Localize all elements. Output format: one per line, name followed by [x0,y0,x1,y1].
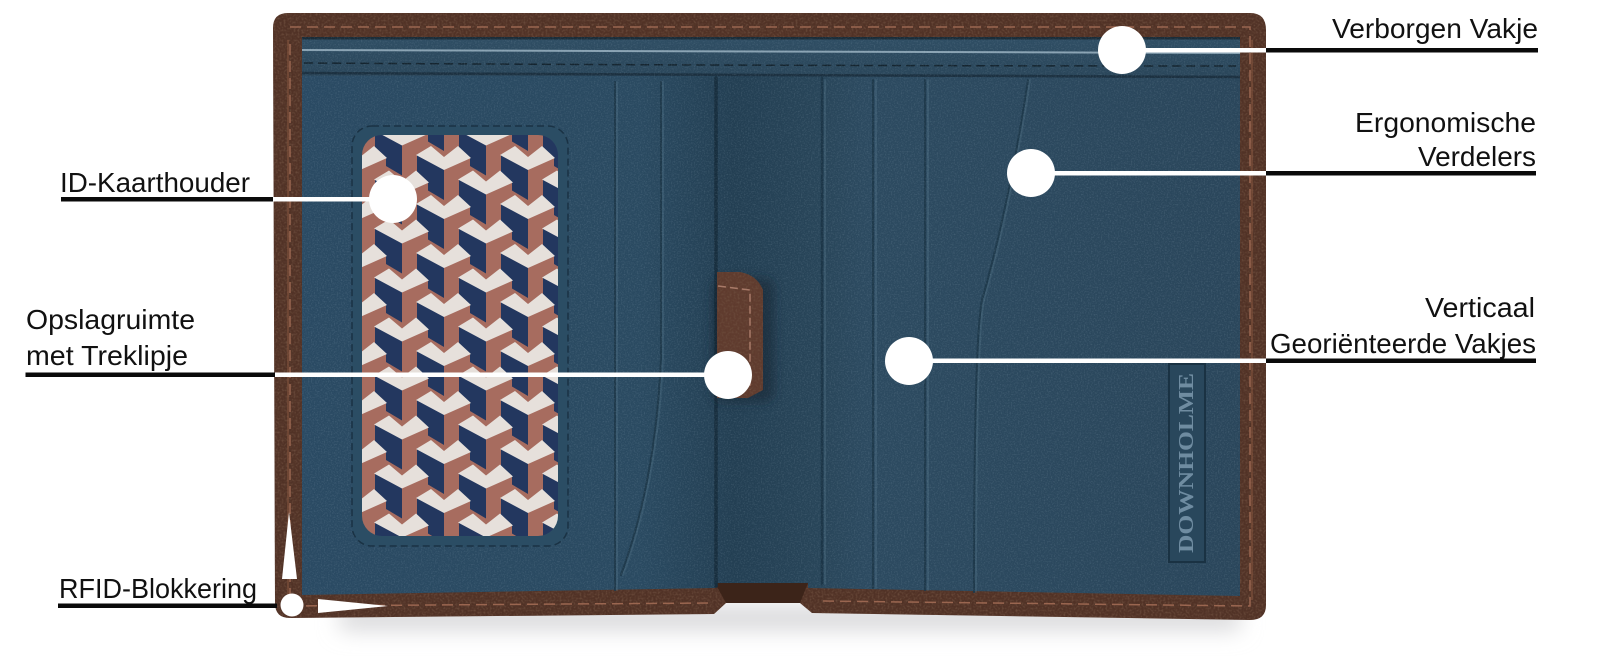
top hidden pocket band [302,37,1240,77]
callout: Opslagruimte met Treklipje [26,304,752,399]
frame leather grain [273,13,1266,620]
embossed logo [1169,364,1205,562]
callout: Opslagruimte met Treklipje: met Treklipje [26,340,188,371]
frame inner seam [288,40,1252,600]
pull tab shadow [712,278,774,402]
ID window patterned lining [362,135,558,536]
callout: Verborgen Vakje: Verborgen Vakje [1332,13,1538,44]
card slot lines [615,78,1030,592]
wallet [273,13,1266,620]
callout: ID-Kaarthouder: ID-Kaarthouder [60,167,250,198]
callout: Verticaal Georiënteerde Vakjes: Georiënteerde Vakjes [1270,328,1536,359]
spine bottom dark gusset [715,583,808,603]
callout: Opslagruimte met Treklipje: Opslagruimte [26,304,195,335]
callout: Ergonomische Verdelers: Verdelers [1418,141,1536,172]
arrow: RFID vertical edge [282,512,297,579]
callout: RFID-Blokkering: RFID-Blokkering [59,573,257,604]
callout: ID-Kaarthouder [60,167,417,223]
frame stitching [290,27,1250,606]
brown leather outer frame [273,13,1266,620]
ID window stitched surround [352,126,568,546]
navy interior [302,37,1240,596]
ground shadow [340,606,1240,630]
callout: Verticaal Georiënteerde Vakjes: Verticaal [1425,292,1535,323]
callout: Verborgen Vakje [1098,13,1538,74]
callout: Ergonomische Verdelers: Ergonomische [1355,107,1536,138]
embossed logo: DOWNHOLME [1174,373,1198,553]
leather grain [302,37,1240,596]
callout: Ergonomische Verdelers [1007,107,1536,197]
callout: RFID-Blokkering [58,512,388,616]
arrow: RFID horizontal edge [318,599,388,613]
callout: Verticaal Georiënteerde Vakjes [885,292,1536,385]
pull tab [717,272,763,398]
